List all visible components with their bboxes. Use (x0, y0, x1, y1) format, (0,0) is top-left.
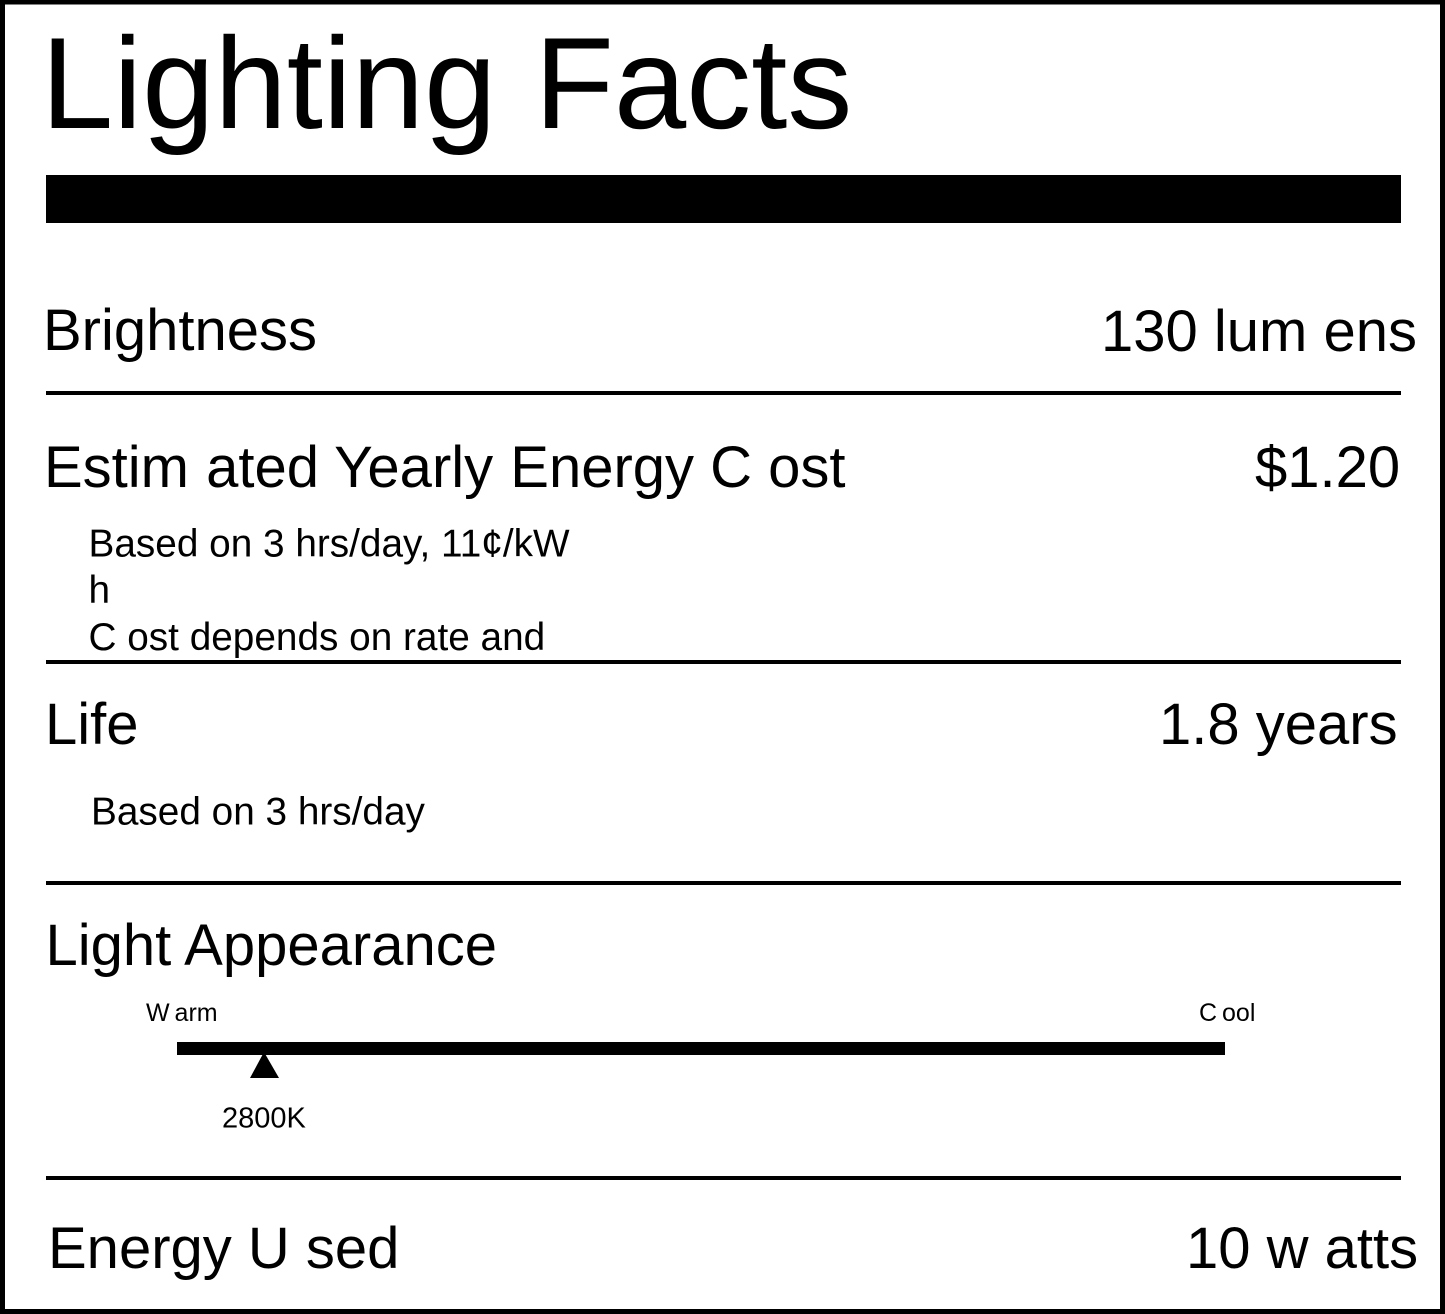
row: estimated yearly energy cost: Estim ated Yearly Energy C ost (44, 435, 846, 500)
row: life: Life (45, 692, 139, 757)
row: brightness: Brightness (43, 298, 317, 363)
cost note: C ost depends on rate and (88, 616, 545, 659)
row: energy used (48, 1216, 1418, 1281)
title: Lighting Facts (41, 10, 852, 156)
colour temperature scale (177, 1042, 1225, 1055)
row: energy used: 10 w atts (1186, 1216, 1418, 1281)
marker value: 2800K (222, 1102, 307, 1134)
row: estimated yearly energy cost: $1.20 (1255, 435, 1400, 500)
title rule (46, 175, 1401, 223)
cool label: C ool (1199, 999, 1255, 1027)
row: life: 1.8 years (1159, 692, 1398, 757)
row: energy used: Energy U sed (48, 1216, 399, 1281)
row: brightness: 130 lum ens (1101, 299, 1417, 364)
marker (250, 1052, 279, 1078)
warm label: W arm (146, 999, 218, 1027)
row: brightness (43, 298, 1417, 364)
row: estimated yearly energy cost (44, 435, 1400, 659)
cost note (88, 522, 570, 659)
cost note: h (88, 569, 110, 612)
life note: Based on 3 hrs/day (91, 790, 426, 834)
row: life (45, 692, 1398, 834)
cost note: Based on 3 hrs/day, 11¢/kW (88, 522, 570, 566)
row: light appearance: Light Appearance (46, 913, 497, 978)
row: light appearance (46, 913, 1255, 1134)
